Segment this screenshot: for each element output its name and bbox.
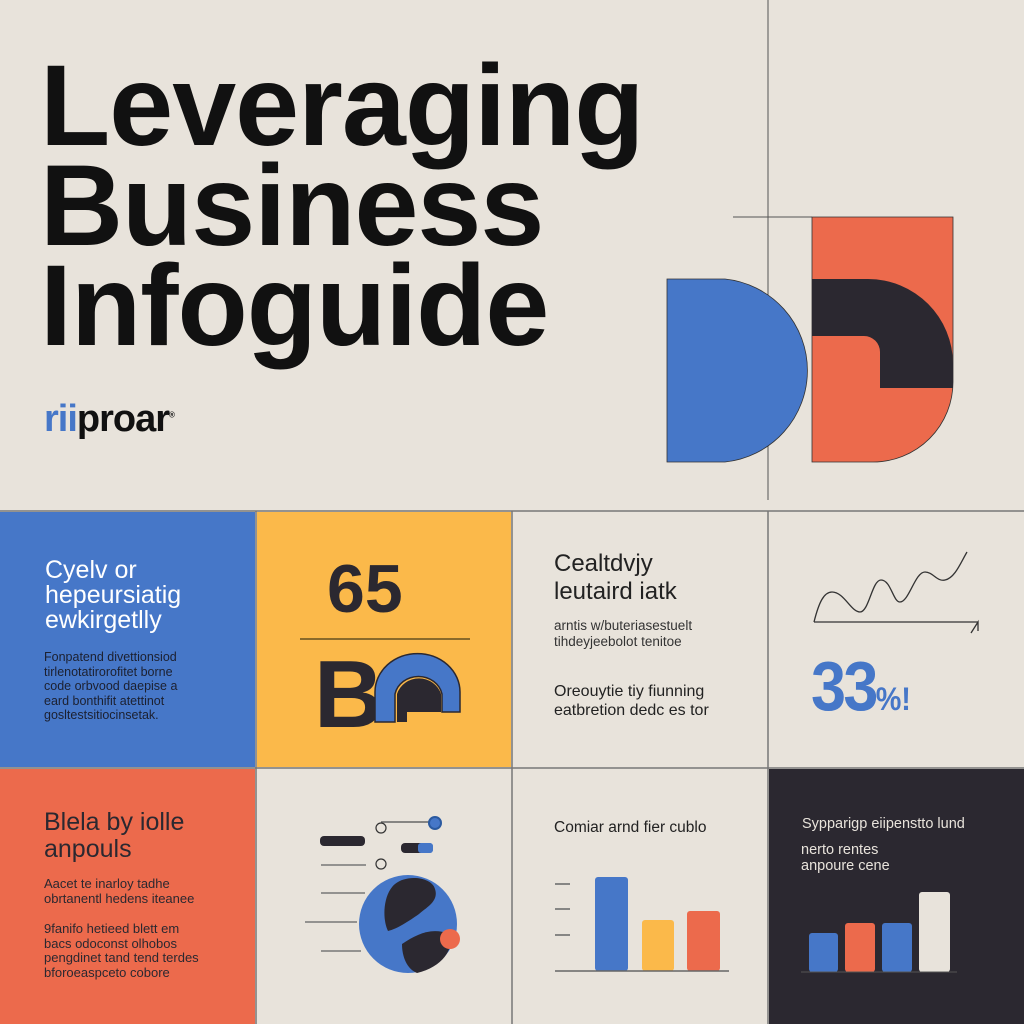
body — [554, 683, 709, 719]
stat 33%: 33%! — [811, 647, 911, 725]
title — [40, 42, 644, 370]
chart title: Comiar arnd fier cublo — [554, 819, 706, 836]
text 2: pengdinet tand tend terdes — [44, 950, 199, 965]
heading: Cyelv or — [45, 556, 137, 584]
panel: yellow stat — [257, 512, 511, 767]
text 2: bacs odoconst olhobos — [44, 936, 177, 950]
body text: tirlenotatirorofitet borne — [44, 664, 173, 678]
heading: hepeursiatig — [45, 581, 181, 609]
panel: blue text — [0, 512, 255, 767]
body text: gosltestsitiocinsetak. — [44, 708, 159, 722]
toggles — [305, 817, 441, 951]
text: Aacet te inarloy tadhe — [44, 876, 170, 891]
text 2: 9fanifo hetieed blett em — [44, 921, 179, 936]
text 2 — [44, 921, 199, 980]
text: anpoure cene — [801, 858, 890, 874]
title: Leveraging — [40, 42, 644, 170]
panel: globe illustration — [305, 816, 460, 973]
text: nerto rentes — [801, 842, 878, 858]
title: Infoguide — [40, 242, 548, 370]
BC letters: B — [314, 641, 383, 748]
logo: riiproar® — [44, 398, 174, 440]
panel: orange text — [0, 769, 255, 1024]
heading — [554, 550, 677, 605]
body text: eard bonthifit atettinot — [44, 694, 164, 708]
text 2: bforoeaspceto cobore — [44, 964, 170, 980]
body: eatbretion dedc es tor — [554, 702, 709, 719]
bar chart — [555, 877, 729, 972]
panel: bar chart — [554, 819, 729, 972]
heading: anpouls — [44, 835, 132, 863]
panel: line chart stat — [811, 552, 979, 725]
bars — [801, 892, 957, 972]
subtext — [554, 618, 692, 649]
hero graphic: geometric shapes — [666, 0, 954, 500]
panel: dark bar chart — [769, 769, 1024, 1024]
subtext: arntis w/buteriasestuelt — [554, 618, 692, 633]
body text: code orbvood daepise a — [44, 679, 177, 693]
heading — [45, 556, 181, 634]
text — [801, 842, 890, 874]
heading: Sypparigp eiipenstto lund — [802, 816, 965, 832]
heading: Cealtdvjy — [554, 550, 653, 577]
panel: text info — [554, 550, 709, 719]
heading: Blela by iolle — [44, 808, 184, 836]
subtext: tihdeyjeebolot tenitoe — [554, 634, 682, 649]
number 65: 65 — [327, 551, 403, 627]
text: obrtanentl hedens iteanee — [44, 891, 194, 906]
globe — [359, 875, 460, 973]
text — [44, 876, 194, 906]
title: Business — [40, 142, 543, 270]
heading: ewkirgetlly — [45, 606, 162, 634]
body text — [44, 650, 178, 722]
heading: leutaird iatk — [554, 578, 677, 605]
line chart — [813, 552, 979, 634]
heading — [44, 808, 184, 863]
body: Oreouytie tiy fiunning — [554, 683, 704, 700]
body text: Fonpatend divettionsiod — [44, 650, 177, 664]
